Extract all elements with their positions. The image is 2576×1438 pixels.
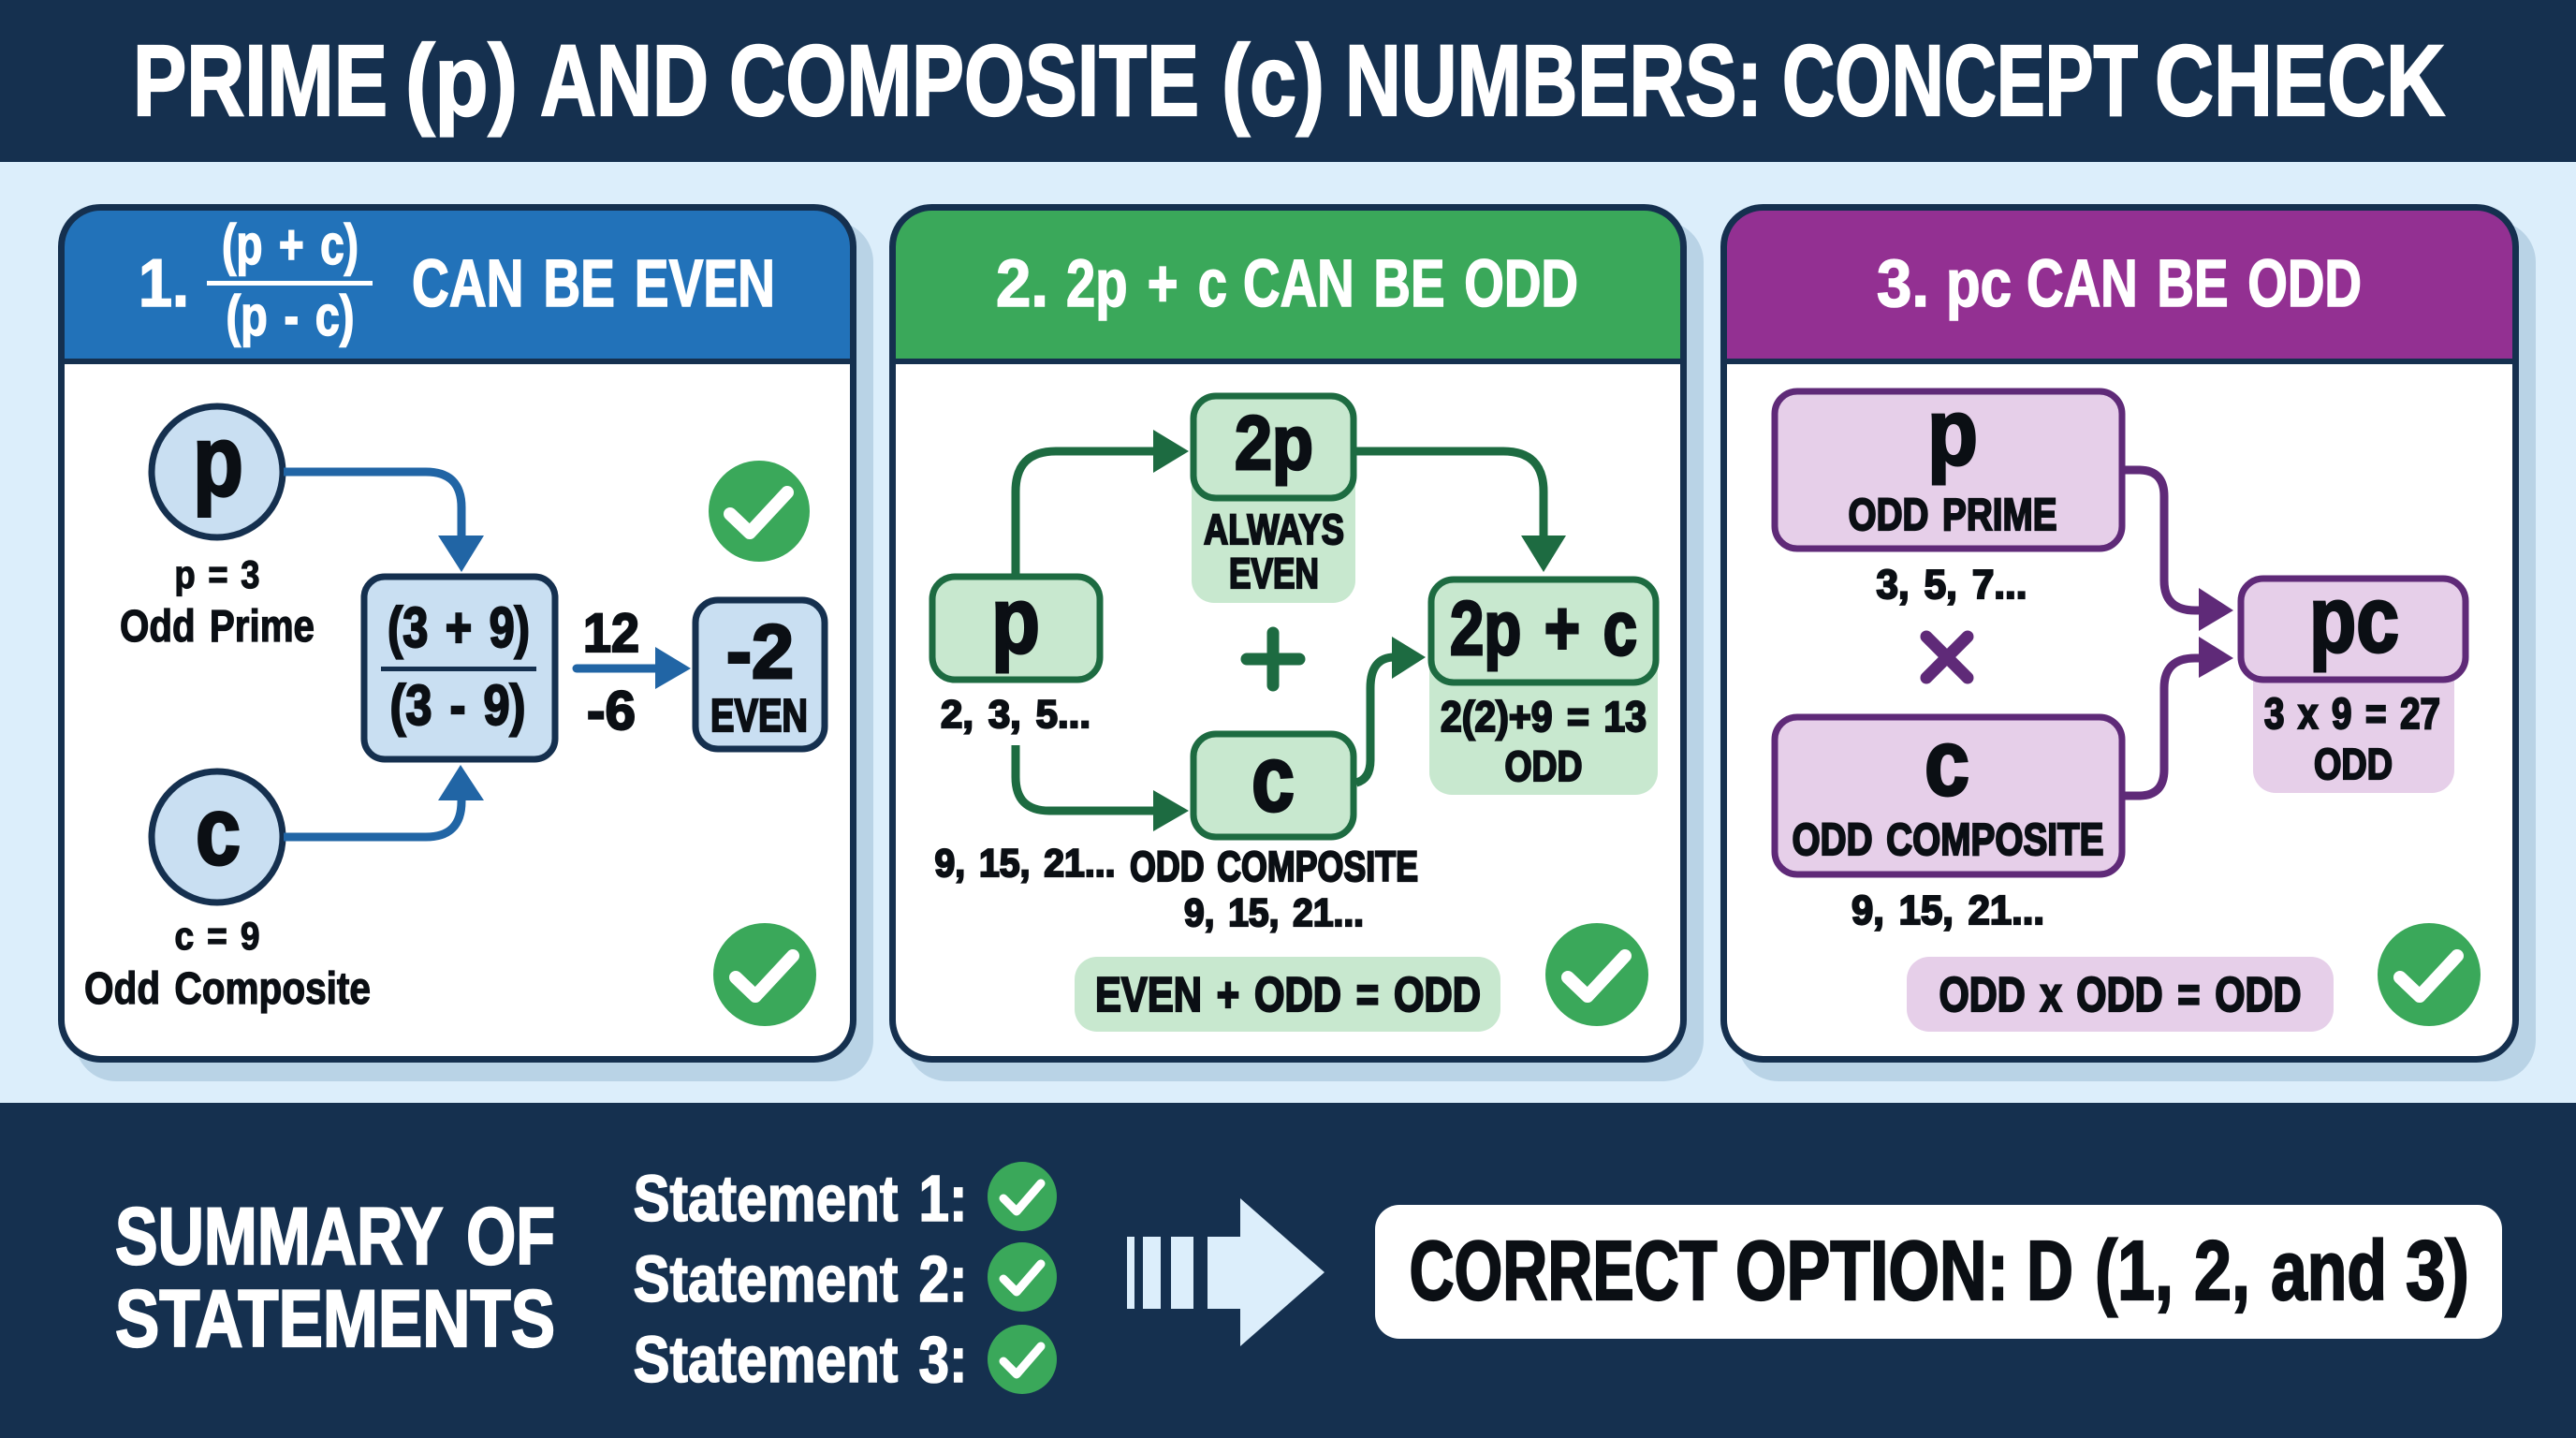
pc box with result	[2241, 567, 2466, 793]
2p box with always even label: ALWAYS	[1204, 506, 1344, 553]
arrow: p to pc	[2124, 470, 2233, 631]
panel 1: fraction can be even	[61, 208, 873, 1081]
pc box with result: 3 x 9 = 27	[2264, 689, 2440, 738]
pc box with result: ODD	[2314, 740, 2393, 788]
summary heading: SUMMARY OF	[115, 1192, 555, 1282]
2p + c box with result: ODD	[1505, 742, 1582, 790]
2p box with always even label	[1192, 396, 1355, 603]
panel 2 heading	[996, 247, 1578, 321]
result box: -2	[726, 609, 794, 695]
title band	[0, 0, 2576, 162]
arrow: p to c	[1016, 745, 1189, 831]
summary band	[0, 1103, 2576, 1438]
arrow: p to 2p	[1016, 430, 1189, 575]
title: (p)	[405, 23, 518, 137]
c box	[1775, 711, 2122, 874]
title: CONCEPT	[1782, 23, 2138, 137]
result box: EVEN	[710, 691, 808, 741]
c box: c	[1251, 726, 1295, 831]
panel 2 heading: 2.	[996, 247, 1048, 321]
c caption: Odd Composite	[84, 964, 371, 1014]
title	[133, 23, 2445, 137]
intermediate values: 12	[583, 603, 639, 664]
c circle	[152, 771, 283, 902]
p circle	[152, 404, 283, 537]
arrow: c to formula	[284, 765, 484, 837]
statement 1: Statement 1:	[633, 1162, 968, 1235]
intermediate values: -6	[587, 681, 636, 741]
correct option box: CORRECT	[1410, 1225, 1718, 1318]
rule pill	[1075, 957, 1500, 1032]
correct option box: (1,	[2095, 1225, 2174, 1318]
title: PRIME	[133, 23, 388, 137]
check icon upper	[709, 461, 810, 562]
p box	[1775, 380, 2122, 549]
correct option box: and	[2271, 1225, 2387, 1318]
2p + c box with result: 2(2)+9 = 13	[1441, 693, 1647, 741]
arrow: c to pc	[2124, 637, 2233, 796]
rule pill	[1907, 957, 2334, 1032]
panel 1 heading: CAN BE EVEN	[412, 247, 775, 321]
summary heading: STATEMENTS	[115, 1274, 555, 1364]
panel 1 heading: (p + c)	[222, 213, 359, 276]
statement 2: Statement 2:	[633, 1242, 968, 1315]
c caption: c = 9	[174, 914, 260, 958]
panel 2 heading: 2p + c	[1066, 247, 1227, 321]
correct option box	[1375, 1205, 2502, 1339]
p box: p	[991, 568, 1040, 673]
panel 1 heading	[139, 213, 775, 347]
c caption	[1130, 843, 1418, 934]
p circle: p	[193, 404, 243, 517]
p box: p	[1927, 380, 1978, 485]
title: CHECK	[2155, 23, 2445, 137]
c caption	[84, 914, 371, 1014]
c values: 9, 15, 21...	[1852, 888, 2044, 933]
2p box with always even label: EVEN	[1229, 550, 1319, 597]
2p + c box with result: 2p + c	[1450, 586, 1637, 671]
rule pill: ODD x ODD = ODD	[1939, 968, 2301, 1022]
arrow: summary to answer	[1127, 1198, 1325, 1346]
formula box	[364, 577, 555, 759]
p caption	[120, 552, 315, 652]
correct option box: 3)	[2406, 1225, 2469, 1318]
p box	[932, 568, 1100, 680]
2p + c box with result	[1429, 580, 1658, 795]
panel 3 heading: 3.	[1877, 247, 1929, 321]
panel 3 heading: pc	[1946, 247, 2012, 321]
check icon lower	[713, 923, 816, 1026]
panel 3: pc can be odd	[1723, 208, 2536, 1081]
c box	[1193, 726, 1354, 837]
correct option box: OPTION:	[1735, 1225, 2009, 1318]
formula box: (3 - 9)	[389, 674, 526, 737]
panel 3 heading	[1877, 247, 2362, 321]
arrow: 2p to sum	[1356, 451, 1566, 572]
rule pill: EVEN + ODD = ODD	[1095, 968, 1481, 1022]
2p box with always even label: 2p	[1235, 401, 1313, 486]
title: COMPOSITE	[729, 23, 1199, 137]
multiply sign	[1926, 637, 1968, 678]
intermediate values	[583, 603, 639, 741]
formula box: (3 + 9)	[388, 596, 530, 659]
statement 3: Statement 3:	[633, 1323, 968, 1396]
title: (c)	[1222, 23, 1325, 137]
result box	[695, 600, 825, 749]
panel 1 heading: (p - c)	[227, 285, 354, 347]
p values: 3, 5, 7...	[1876, 562, 2027, 608]
panel 1 heading: 1.	[139, 246, 189, 321]
panel 3 heading: CAN BE ODD	[2027, 247, 2362, 321]
p caption: Odd Prime	[120, 602, 315, 652]
summary heading	[115, 1192, 555, 1364]
p values: 2, 3, 5...	[941, 692, 1090, 736]
panel 2 heading: CAN BE ODD	[1243, 247, 1578, 321]
pc box with result: pc	[2309, 567, 2399, 672]
c box: c	[1925, 711, 1969, 815]
title: NUMBERS:	[1345, 23, 1763, 137]
panel 2: 2p + c can be odd	[892, 208, 1704, 1081]
correct option box: D	[2027, 1225, 2073, 1318]
c circle: c	[196, 777, 241, 885]
plus sign	[1247, 633, 1299, 685]
arrow: p to formula	[284, 472, 484, 572]
c box: ODD COMPOSITE	[1792, 815, 2104, 865]
check icon	[1545, 923, 1648, 1026]
correct option box: 2,	[2194, 1225, 2250, 1318]
arrow: to result	[577, 647, 691, 689]
title: AND	[540, 23, 709, 137]
c caption: 9, 15, 21...	[1184, 890, 1364, 934]
arrow: c to sum	[1356, 637, 1426, 783]
c values left: 9, 15, 21...	[934, 841, 1116, 885]
c caption: ODD COMPOSITE	[1130, 843, 1418, 890]
p caption: p = 3	[174, 552, 260, 596]
p box: ODD PRIME	[1848, 491, 2057, 540]
check icon	[2378, 923, 2481, 1026]
